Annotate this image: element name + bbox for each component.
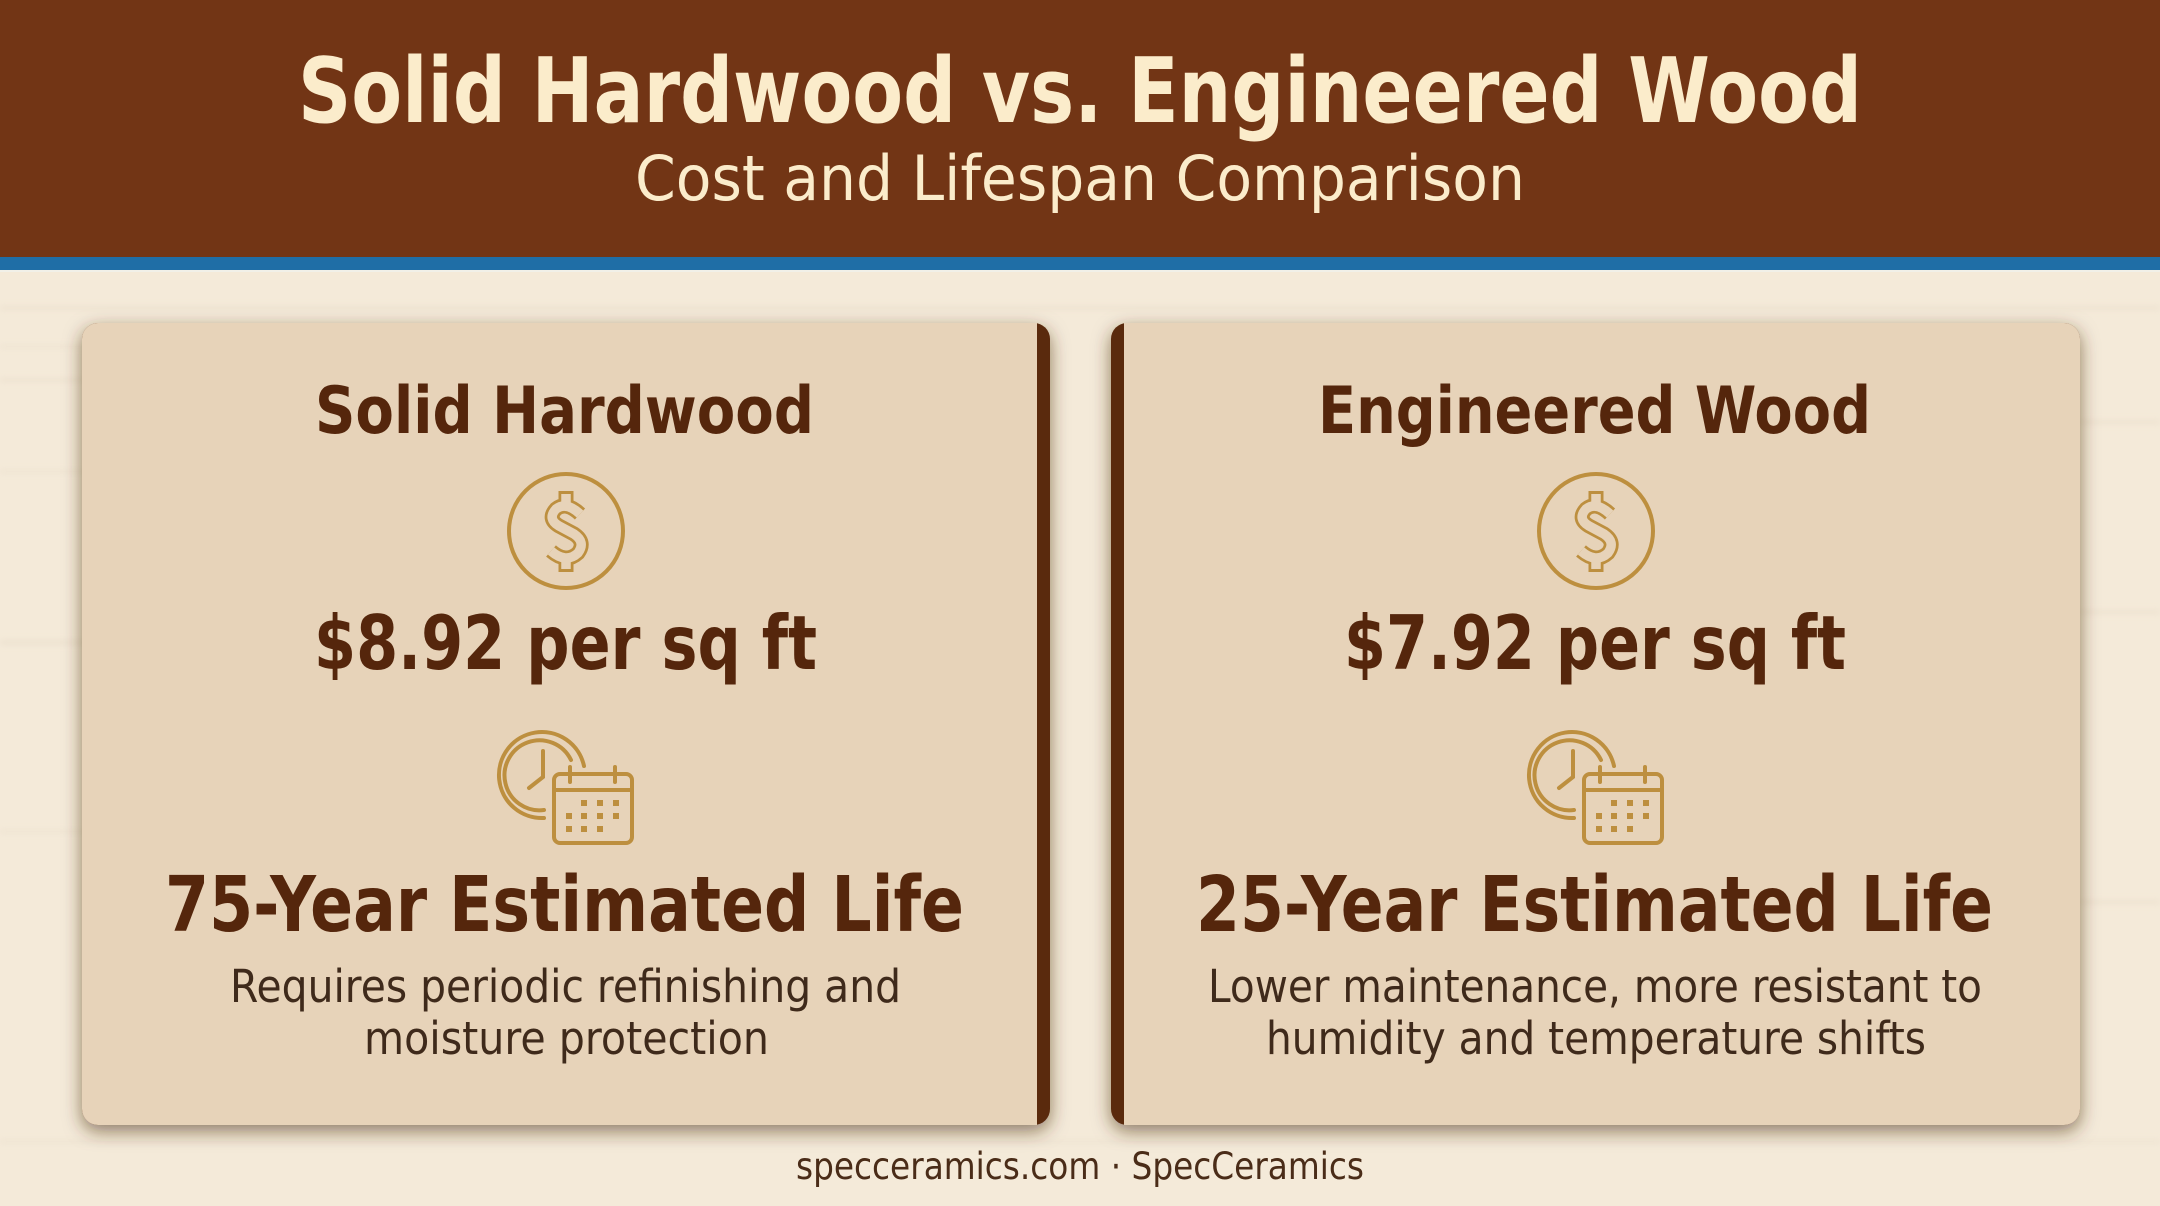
heading: Solid Hardwood [315, 374, 814, 449]
description: humidity and temperature shifts [1266, 1012, 1926, 1065]
footer credit: specceramics.com · SpecCeramics [796, 1145, 1364, 1188]
description [1208, 960, 1982, 1065]
lifespan: 75-Year Estimated Life [165, 861, 964, 950]
price: $7.92 per sq ft [1344, 599, 1846, 687]
icon: dollar coin [1539, 474, 1653, 588]
panel background [82, 323, 1050, 1125]
description: moisture protection [364, 1012, 769, 1065]
icon: dollar coin [509, 474, 623, 588]
description: Requires periodic refinishing and [230, 960, 901, 1013]
panel background [1111, 323, 2080, 1125]
icon: clock and calendar [1529, 732, 1662, 843]
price: $8.92 per sq ft [314, 599, 817, 687]
icon: clock and calendar [499, 732, 632, 843]
description: Lower maintenance, more resistant to [1208, 960, 1982, 1013]
title: Solid Hardwood vs. Engineered Wood [298, 39, 1862, 144]
panel: engineered wood [1111, 323, 2080, 1125]
subtitle: Cost and Lifespan Comparison [635, 142, 1525, 215]
lifespan: 25-Year Estimated Life [1196, 861, 1993, 950]
header band [0, 0, 2160, 272]
background: pale wood [0, 270, 2160, 1206]
heading: Engineered Wood [1318, 374, 1871, 449]
description [230, 960, 901, 1065]
panel: solid hardwood [82, 323, 1050, 1125]
